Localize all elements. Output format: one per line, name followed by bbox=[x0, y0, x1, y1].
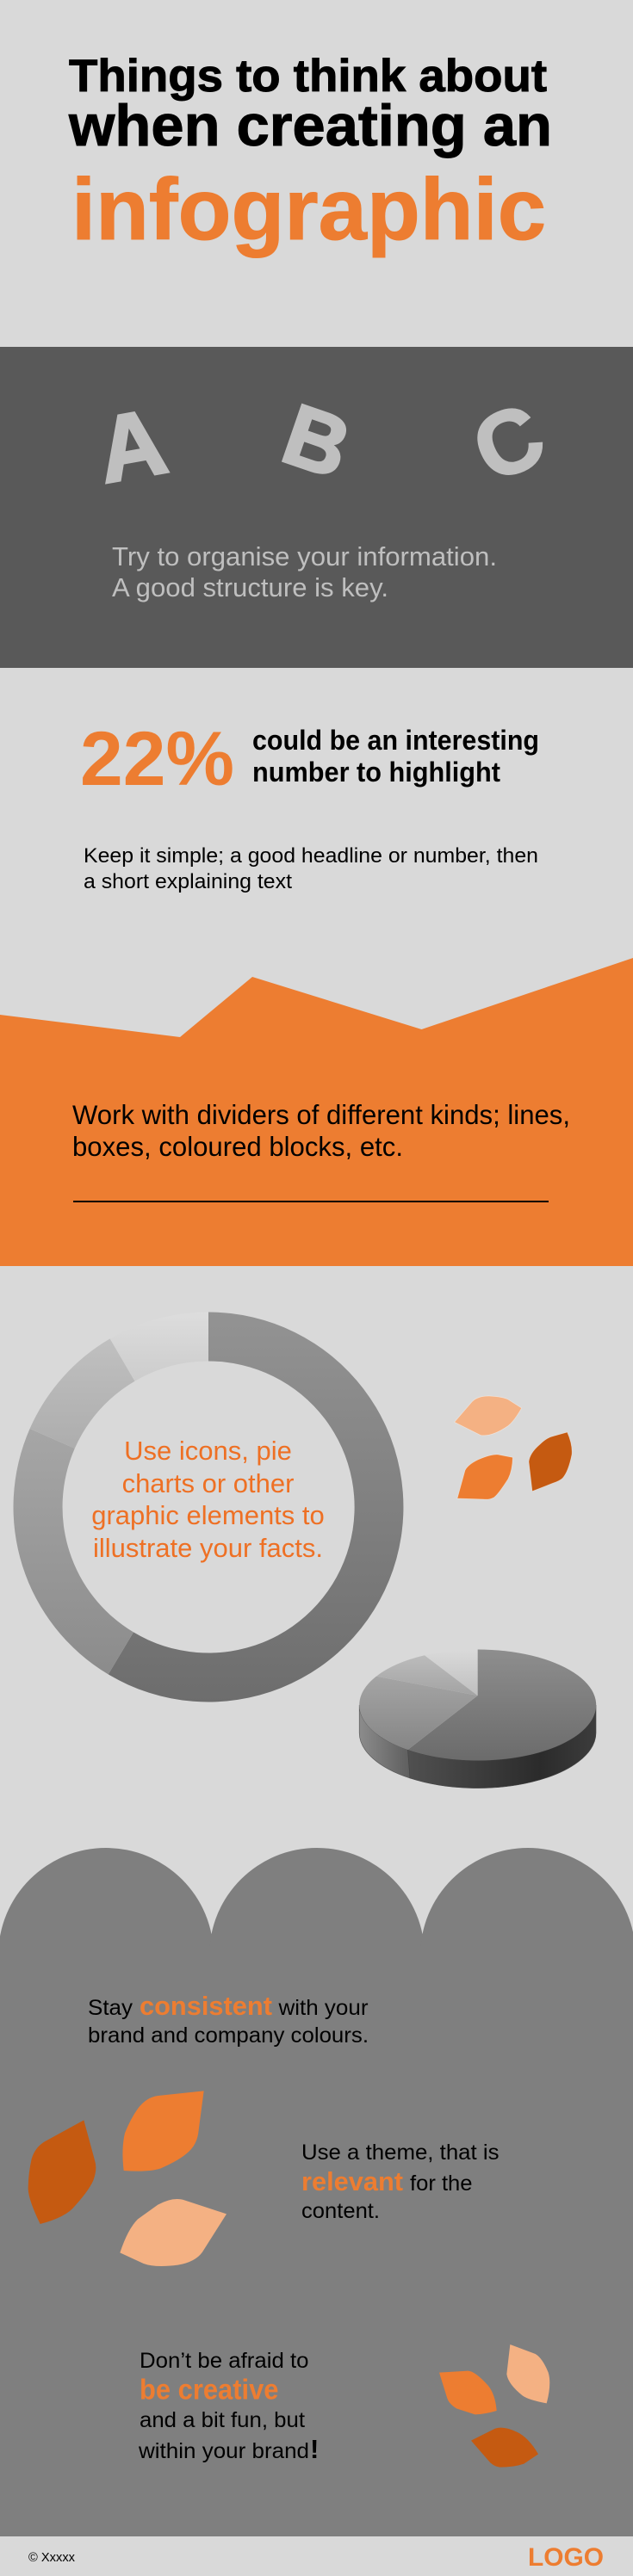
consistent text: consistent bbox=[140, 1991, 272, 2021]
number caption bbox=[252, 725, 539, 788]
keep it simple text: Keep it simple; a good headline or number, then bbox=[84, 844, 538, 868]
divider text bbox=[72, 1099, 570, 1162]
structure text: A good structure is key. bbox=[112, 572, 388, 602]
letters A B C: A bbox=[90, 388, 174, 503]
icon: lower leaf cluster bbox=[439, 2344, 549, 2468]
be creative text bbox=[138, 2349, 319, 2464]
title: infographic bbox=[71, 162, 546, 258]
3D pie chart bbox=[359, 1649, 596, 1788]
title: Things to think about bbox=[69, 51, 547, 102]
keep it simple text: a short explaining text bbox=[84, 870, 292, 893]
be creative text: and a bit fun, but bbox=[140, 2408, 305, 2432]
be creative text: ! bbox=[310, 2434, 319, 2464]
relevant text: Use a theme, that is bbox=[301, 2140, 500, 2165]
icon: large leaf cluster bbox=[28, 2091, 227, 2266]
title: when creating an bbox=[68, 93, 552, 158]
keep it simple text bbox=[84, 844, 538, 893]
divider text: Work with dividers of different kinds; lines, bbox=[72, 1099, 570, 1130]
number caption: number to highlight bbox=[252, 757, 500, 788]
structure text: Try to organise your information. bbox=[112, 541, 497, 571]
consistent text: Stay bbox=[88, 1996, 133, 2020]
letters A B C: C bbox=[459, 385, 559, 502]
donut centre text bbox=[91, 1436, 325, 1563]
structure text bbox=[112, 541, 497, 602]
consistent text bbox=[88, 1991, 369, 2048]
relevant text: content. bbox=[301, 2199, 380, 2223]
be creative text: within your brand bbox=[138, 2439, 309, 2463]
be creative text: be creative bbox=[140, 2374, 279, 2405]
donut centre text: illustrate your facts. bbox=[93, 1533, 323, 1563]
be creative text: Don’t be afraid to bbox=[140, 2349, 308, 2373]
donut centre text: charts or other bbox=[122, 1468, 294, 1498]
panel: scalloped grey block bbox=[0, 1848, 633, 2536]
letters A B C: B bbox=[271, 386, 362, 497]
consistent text: brand and company colours. bbox=[88, 2023, 369, 2048]
number caption: could be an interesting bbox=[252, 725, 539, 756]
relevant text: relevant bbox=[301, 2166, 403, 2196]
icon: small leaf cluster bbox=[455, 1396, 572, 1499]
title bbox=[68, 51, 552, 258]
donut centre text: graphic elements to bbox=[91, 1500, 325, 1530]
panel: orange divider block bbox=[0, 958, 633, 1266]
highlighted number: 22%: 22% bbox=[80, 715, 234, 801]
copyright: © Xxxxx bbox=[28, 2551, 76, 2565]
consistent text: with your bbox=[277, 1996, 369, 2020]
relevant text: for the bbox=[410, 2171, 472, 2196]
panel: structure bbox=[0, 347, 633, 668]
letters A B C bbox=[90, 385, 559, 503]
relevant text bbox=[301, 2140, 500, 2223]
divider text: boxes, coloured blocks, etc. bbox=[72, 1131, 403, 1162]
donut centre text: Use icons, pie bbox=[124, 1436, 292, 1466]
divider line bbox=[73, 1201, 549, 1202]
donut chart bbox=[13, 1312, 403, 1702]
logo: LOGO bbox=[528, 2543, 604, 2572]
